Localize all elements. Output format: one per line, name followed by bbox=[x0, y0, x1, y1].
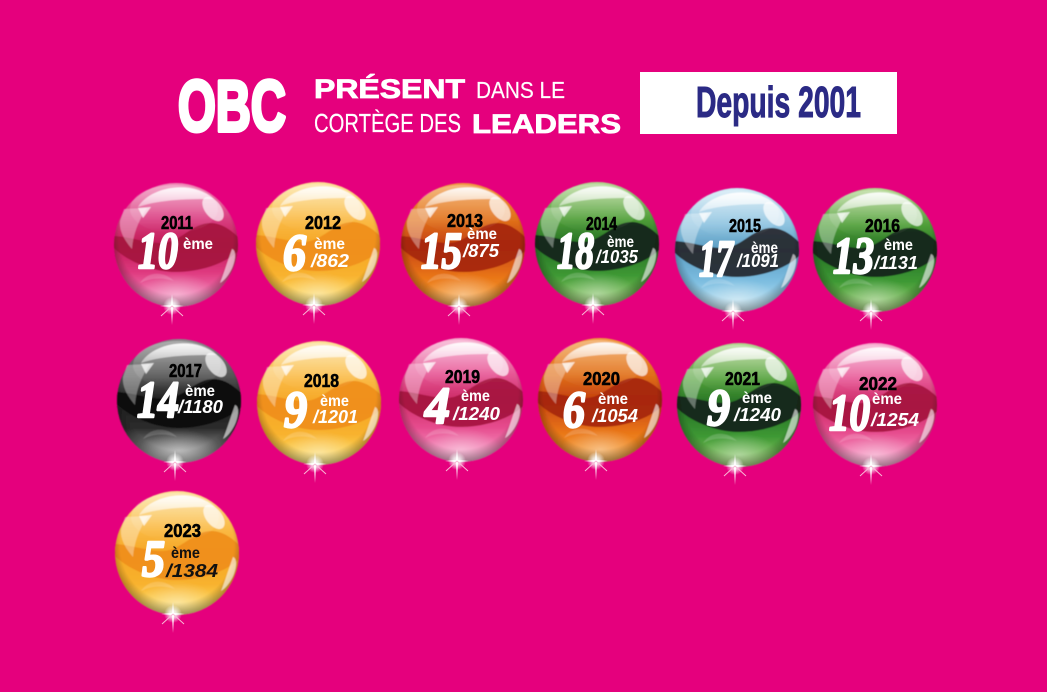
sphere: 2019: ème bbox=[461, 388, 490, 405]
heading: présent dans le cortège des leaders: LEADERS bbox=[472, 109, 621, 139]
sphere: 2016: /1131 bbox=[873, 253, 918, 273]
sphere: 2014: 18 bbox=[557, 223, 594, 280]
sphere: 2019 bbox=[399, 338, 523, 480]
sphere: 2013 bbox=[401, 183, 525, 325]
sphere: 2021: 9 bbox=[707, 380, 730, 437]
sphere: 2018: ème bbox=[320, 393, 349, 410]
heading: présent dans le cortège des leaders: PRÉSENT bbox=[314, 73, 466, 104]
sphere: 2022: /1254 bbox=[870, 410, 919, 430]
sphere: 2021: 2021 bbox=[725, 369, 760, 389]
sphere: 2013: 2013 bbox=[447, 211, 483, 231]
title: OBC: OBC bbox=[178, 67, 286, 147]
badge: depuis 2001: Depuis 2001 bbox=[696, 78, 861, 127]
sphere: 2020: /1054 bbox=[591, 406, 638, 426]
sphere: 2020: ème bbox=[598, 391, 628, 408]
sphere: 2012: ème bbox=[314, 236, 345, 253]
sphere: 2017: ème bbox=[185, 383, 215, 400]
sphere: 2016: 13 bbox=[833, 228, 874, 285]
sphere: 2022: 2022 bbox=[859, 374, 897, 394]
sphere: 2021 bbox=[677, 343, 801, 485]
sphere: 2021: /1240 bbox=[733, 405, 781, 425]
sphere: 2015: /1091 bbox=[736, 251, 779, 271]
sphere: 2016 bbox=[813, 188, 937, 330]
sphere: 2018: 9 bbox=[284, 382, 307, 439]
sphere: 2020: 2020 bbox=[583, 369, 620, 389]
sphere: 2015 bbox=[675, 188, 799, 330]
sphere: 2014: /1035 bbox=[595, 247, 639, 267]
sphere: 2012: 2012 bbox=[305, 213, 341, 233]
sphere: 2011 bbox=[114, 183, 238, 325]
sphere: 2015: ème bbox=[751, 240, 778, 257]
sphere: 2023: 5 bbox=[142, 531, 165, 588]
sphere: 2015: 2015 bbox=[729, 216, 761, 236]
heading: présent dans le cortège des leaders bbox=[314, 73, 621, 139]
sphere: 2023: ème bbox=[171, 545, 200, 562]
heading: présent dans le cortège des leaders: DANS LE bbox=[476, 77, 565, 103]
sphere: 2021: ème bbox=[742, 390, 772, 407]
heading: présent dans le cortège des leaders: CORTÈGE DES bbox=[314, 108, 461, 138]
sphere: 2022 bbox=[813, 343, 937, 485]
sphere: 2016: ème bbox=[884, 237, 913, 254]
sphere: 2022: 10 bbox=[829, 385, 870, 442]
sphere: 2019: 2019 bbox=[445, 367, 480, 387]
sphere: 2018 bbox=[257, 341, 381, 483]
sphere: 2018: 2018 bbox=[304, 371, 339, 391]
sphere: 2011: 2011 bbox=[161, 213, 193, 233]
sphere: 2014: 2014 bbox=[586, 214, 617, 234]
sphere: 2016: 2016 bbox=[865, 216, 900, 236]
sphere: 2014: ème bbox=[607, 234, 634, 251]
sphere: 2023: 2023 bbox=[164, 521, 201, 541]
sphere: 2017 bbox=[117, 339, 241, 481]
sphere: 2017: 14 bbox=[137, 372, 179, 429]
badge: depuis 2001 bbox=[640, 72, 897, 134]
sphere: 2014 bbox=[535, 182, 659, 324]
sphere: 2019: /1240 bbox=[452, 404, 500, 424]
sphere: 2015: 17 bbox=[699, 231, 734, 288]
sphere: 2011: ème bbox=[183, 236, 213, 253]
sphere: 2018: /1201 bbox=[312, 407, 358, 427]
sphere: 2013: /875 bbox=[462, 241, 500, 261]
sphere: 2017: /1180 bbox=[177, 397, 223, 417]
sphere: 2022: ème bbox=[872, 391, 902, 408]
sphere: 2012: 6 bbox=[283, 225, 306, 282]
sphere: 2023: /1384 bbox=[165, 561, 218, 581]
sphere: 2012 bbox=[256, 182, 380, 324]
sphere: 2020: 6 bbox=[563, 382, 585, 439]
sphere: 2020 bbox=[538, 338, 662, 480]
sphere: 2023 bbox=[115, 491, 239, 633]
sphere: 2013: 15 bbox=[421, 223, 462, 280]
sphere: 2019: 4 bbox=[424, 378, 450, 435]
sphere: 2011: 10 bbox=[138, 223, 178, 280]
sphere: 2017: 2017 bbox=[169, 361, 202, 381]
sphere: 2012: /862 bbox=[310, 251, 349, 271]
sphere: 2013: ème bbox=[467, 226, 497, 243]
